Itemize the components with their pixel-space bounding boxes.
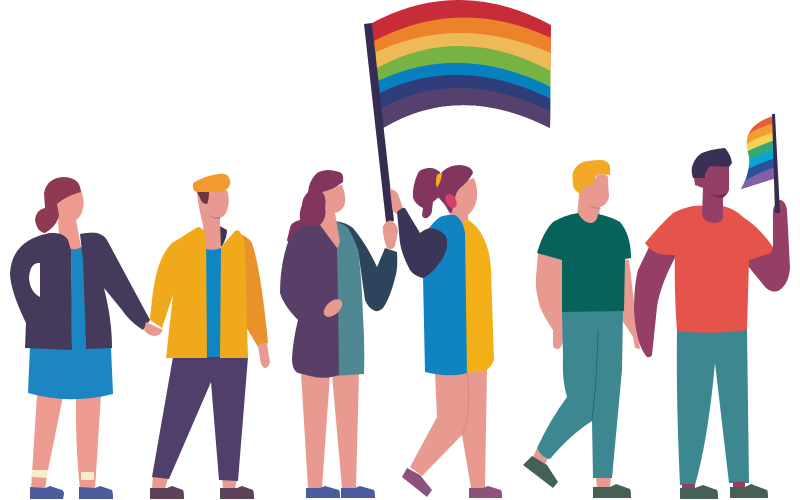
- left arm: [536, 253, 564, 349]
- shoes: [150, 486, 254, 499]
- top hair: [437, 165, 473, 213]
- hair: [287, 170, 343, 242]
- jacket: [10, 233, 72, 350]
- neck and face: [197, 190, 229, 252]
- small rainbow flag: [741, 116, 774, 189]
- left arm: [634, 245, 677, 357]
- right arm: [622, 259, 640, 349]
- dark sleeve: [335, 221, 397, 311]
- held hands: [144, 322, 163, 336]
- chin shadow: [589, 205, 602, 209]
- hand: [390, 189, 403, 214]
- collar shadow: [218, 225, 227, 246]
- hair: [572, 160, 610, 195]
- shoes: [402, 468, 432, 497]
- person 1: woman with blue dress: [10, 177, 150, 499]
- person 5: man in green t-shirt: [523, 160, 640, 498]
- hair: [35, 177, 81, 233]
- ankles: [533, 446, 611, 488]
- front leg: [410, 371, 469, 476]
- shoes: [680, 484, 768, 499]
- blue dress: [28, 246, 113, 399]
- neck and face: [57, 190, 84, 252]
- person 4: woman with blue and yellow dress: [390, 165, 502, 498]
- hair: [692, 148, 732, 178]
- leg seam: [462, 373, 469, 435]
- ankles: [682, 482, 745, 490]
- shoes: [30, 486, 113, 499]
- trousers: [537, 309, 623, 478]
- neck and face: [694, 165, 729, 223]
- sleeve: [397, 208, 447, 278]
- big flag pole: [364, 23, 394, 222]
- ponytail: [413, 168, 440, 218]
- socks: [32, 470, 94, 480]
- t-shirt: [537, 213, 631, 312]
- chin shadow: [709, 193, 727, 198]
- person 3: woman with half purple dress: [280, 170, 398, 498]
- right arm: [745, 200, 790, 292]
- hand on pole: [383, 221, 398, 249]
- earring: [443, 192, 459, 210]
- yellow dress: [460, 219, 494, 373]
- back leg: [460, 368, 487, 488]
- hat hair: [193, 174, 230, 192]
- big rainbow flag: [360, 0, 560, 222]
- shoes: [306, 486, 375, 498]
- t-shirt: [645, 206, 773, 333]
- legs: [31, 395, 101, 489]
- orange sleeve: [236, 233, 268, 347]
- small flag pole: [772, 114, 780, 213]
- legs ankles: [152, 475, 237, 489]
- neck and face: [450, 178, 477, 224]
- shoes: [523, 456, 558, 488]
- sideburn: [197, 192, 209, 204]
- teal dress: [330, 221, 364, 376]
- person 6: man in red t-shirt with small flag: [634, 110, 790, 499]
- trouser seam: [592, 330, 598, 420]
- trousers: [677, 329, 749, 485]
- neck and face: [577, 174, 609, 224]
- blue shirt: [206, 248, 221, 357]
- hand: [258, 343, 270, 368]
- hair tie: [436, 172, 442, 188]
- hand on hip: [320, 296, 346, 320]
- purple dress: [280, 225, 339, 378]
- blue dress: [423, 215, 467, 375]
- person 2: man in yellow jacket: [144, 174, 270, 499]
- chin shadow: [207, 214, 220, 219]
- neck and face: [318, 185, 345, 249]
- trousers: [152, 357, 248, 481]
- legs: [301, 373, 359, 488]
- jacket: [150, 227, 248, 358]
